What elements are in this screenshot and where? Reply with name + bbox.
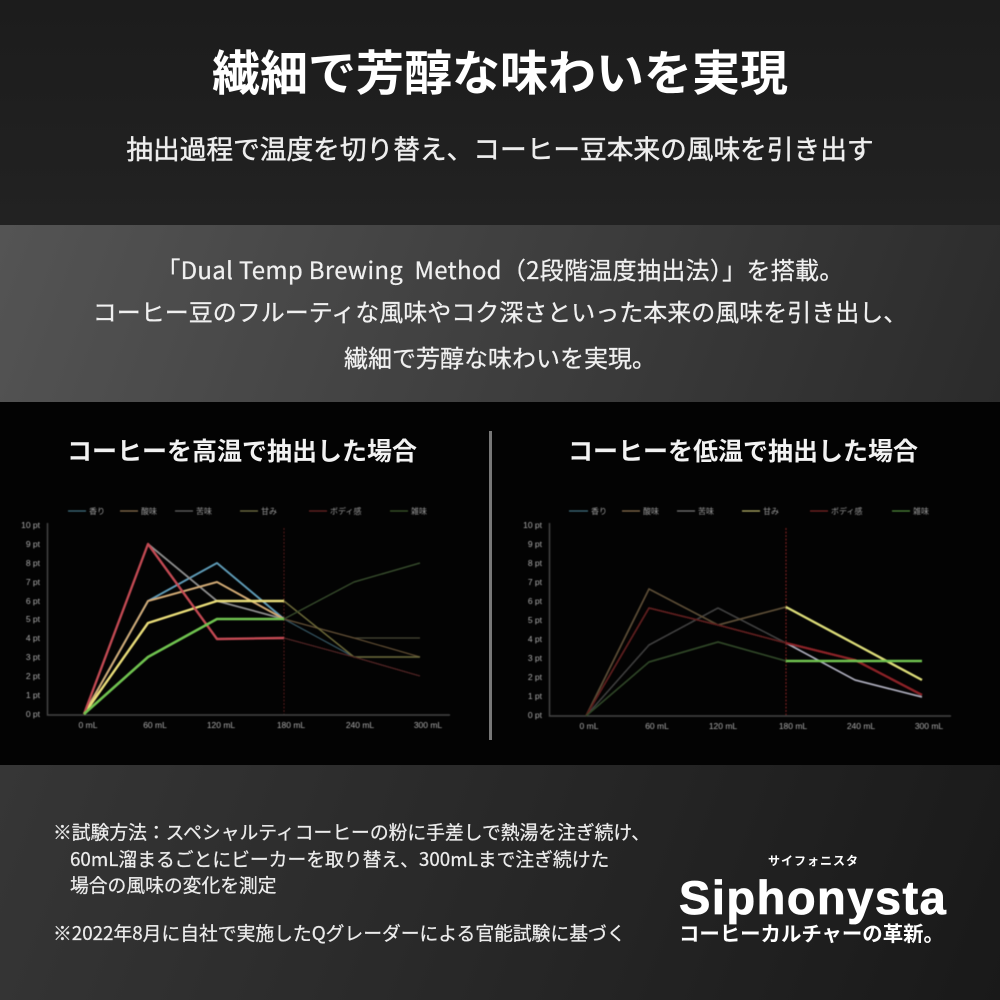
axes xyxy=(550,523,951,716)
series: acidity xyxy=(586,589,786,716)
description text: 「Dual Temp Brewing Method（2段階温度抽出法）」を搭載。 xyxy=(156,251,844,286)
legend: high temperature: ボディ感 xyxy=(330,506,361,516)
panel: header xyxy=(0,0,1000,225)
marker at 180 mL xyxy=(283,528,285,714)
marker at 180 mL xyxy=(785,528,787,715)
y axis labels xyxy=(21,520,41,719)
heading: low temperature: コーヒーを低温で抽出した場合 xyxy=(568,438,918,466)
footnote: test method: 場合の風味の変化を測定 xyxy=(70,871,277,898)
y axis labels: 6 pt xyxy=(528,596,543,606)
legend: low temperature: 甘み xyxy=(763,506,779,516)
series: sweetness xyxy=(84,601,284,714)
y axis labels: 2 pt xyxy=(528,672,543,682)
y axis labels: 2 pt xyxy=(26,671,41,681)
y axis labels: 1 pt xyxy=(528,691,543,701)
x axis labels: 240 mL xyxy=(346,720,374,730)
y axis labels: 4 pt xyxy=(26,633,41,643)
x axis labels xyxy=(79,720,442,730)
y axis labels: 10 pt xyxy=(21,520,41,530)
chart: high temperature xyxy=(21,506,450,730)
divider between charts xyxy=(489,431,492,740)
x axis labels xyxy=(580,721,943,731)
y axis labels: 6 pt xyxy=(26,596,41,606)
legend: low temperature: 酸味 xyxy=(643,506,659,516)
y axis labels: 3 pt xyxy=(26,652,41,662)
legend: low temperature: 雑味 xyxy=(913,506,929,516)
y axis labels: 1 pt xyxy=(26,690,41,700)
legend: high temperature: 香り xyxy=(89,506,105,516)
axes xyxy=(48,523,450,715)
x axis labels: 0 mL xyxy=(79,720,98,730)
x axis labels: 120 mL xyxy=(207,720,235,730)
x axis labels: 180 mL xyxy=(277,720,305,730)
series: aroma tail xyxy=(786,643,922,697)
description text: コーヒー豆のフルーティな風味やコク深さといった本来の風味を引き出し、 xyxy=(93,293,907,328)
y axis labels: 9 pt xyxy=(528,539,543,549)
y axis labels xyxy=(523,520,543,720)
x axis labels: 120 mL xyxy=(709,721,737,731)
title: 繊細で芳醇な味わいを実現 xyxy=(212,48,788,101)
y axis labels: 9 pt xyxy=(26,539,41,549)
series: aroma xyxy=(84,563,284,714)
y axis labels: 0 pt xyxy=(26,709,41,719)
legend: high temperature: 酸味 xyxy=(141,506,157,516)
legend: high temperature: 甘み xyxy=(261,506,277,516)
series: bitterness and aroma xyxy=(586,608,786,716)
x axis labels: 240 mL xyxy=(847,721,875,731)
x axis labels: 60 mL xyxy=(143,720,167,730)
legend: low temperature: ボディ感 xyxy=(831,506,862,516)
heading: high temperature: コーヒーを高温で抽出した場合 xyxy=(67,438,417,466)
panel: charts xyxy=(0,402,1000,765)
description text: 繊細で芳醇な味わいを実現。 xyxy=(344,339,656,374)
chart headings and line charts xyxy=(21,431,952,740)
x axis labels: 300 mL xyxy=(414,720,442,730)
x axis labels: 60 mL xyxy=(645,721,669,731)
footnote: sensory test: ※2022年8月に自社で実施したQグレーダーによる官能試験に基づく xyxy=(53,919,626,946)
legend: low temperature: 香り xyxy=(591,506,607,516)
x axis labels: 300 mL xyxy=(915,721,943,731)
series: body xyxy=(586,608,786,716)
series: body xyxy=(84,544,284,714)
y axis labels: 10 pt xyxy=(523,520,543,530)
series: off-flavor xyxy=(586,642,786,716)
footnote: test method xyxy=(53,818,650,898)
panel: description band xyxy=(0,225,1000,402)
x axis labels: 0 mL xyxy=(580,721,599,731)
legend: low temperature xyxy=(569,506,929,516)
series: acidity xyxy=(84,582,284,714)
y axis labels: 0 pt xyxy=(528,710,543,720)
chart: low temperature xyxy=(523,506,951,731)
legend: high temperature: 苦味 xyxy=(196,506,212,516)
y axis labels: 4 pt xyxy=(528,634,543,644)
legend: low temperature: 苦味 xyxy=(698,506,714,516)
description text xyxy=(93,251,907,374)
y axis labels: 8 pt xyxy=(26,558,41,568)
brand name: Siphonysta xyxy=(679,871,947,924)
y axis labels: 7 pt xyxy=(528,577,543,587)
y axis labels: 7 pt xyxy=(26,577,41,587)
footnote: test method: ※試験方法：スペシャルティコーヒーの粉に手差しで熱湯を注ぎ続け、 xyxy=(53,818,650,845)
y axis labels: 8 pt xyxy=(528,558,543,568)
brand logo xyxy=(679,854,947,946)
x axis labels: 180 mL xyxy=(779,721,807,731)
series: sweetness xyxy=(786,607,922,680)
y axis labels: 5 pt xyxy=(26,614,41,624)
subtitle: 抽出過程で温度を切り替え、コーヒー豆本来の風味を引き出す xyxy=(126,135,874,165)
panel: footer xyxy=(0,765,1000,1000)
y axis labels: 3 pt xyxy=(528,653,543,663)
series: off-flavor xyxy=(84,619,284,714)
brand katakana: サイフォニスタ xyxy=(768,854,859,868)
brand tagline: コーヒーカルチャーの革新。 xyxy=(679,924,944,946)
series: bitterness xyxy=(148,544,284,619)
legend: high temperature xyxy=(68,506,427,516)
y axis labels: 5 pt xyxy=(528,615,543,625)
legend: high temperature: 雑味 xyxy=(411,506,427,516)
footnote: test method: 60mL溜まるごとにビーカーを取り替え、300mLまで注ぎ続けた xyxy=(70,845,609,872)
